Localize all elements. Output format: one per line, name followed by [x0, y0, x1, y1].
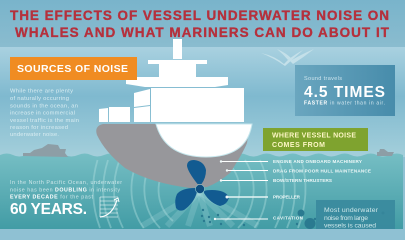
- callout lines and labels: DRAG FROM POOR HULL MAINTENANCE: [273, 169, 371, 174]
- text: doubling stat: [10, 180, 122, 218]
- title: THE EFFECTS OF VESSEL UNDERWATER NOISE ON: [10, 8, 389, 23]
- callout lines and labels: CAVITATION: [273, 216, 304, 221]
- text: sources paragraph: reason for increased: [10, 125, 68, 131]
- panel: where vessel noise comes from: [263, 128, 368, 151]
- bridge: [159, 64, 196, 78]
- text: doubling stat: noise has been DOUBLING in intensity: [10, 188, 120, 194]
- callout lines and labels: BOW/STERN THRUSTERS: [273, 178, 332, 183]
- bulb: [156, 124, 252, 157]
- panel: sound travels: 4.5 TIMES: [304, 84, 385, 101]
- text: sources paragraph: [10, 89, 79, 138]
- text: sources paragraph: underwater noise.: [10, 132, 59, 138]
- title band: [0, 0, 405, 47]
- distant ship left: [23, 144, 68, 157]
- text: doubling stat: In the North Pacific Ocean, underwater: [10, 180, 122, 186]
- propeller: [175, 160, 229, 211]
- panel: large vessels: noise from large: [324, 215, 368, 222]
- panel: sound travels: Sound travels: [304, 76, 342, 82]
- panel: where vessel noise comes from: COMES FROM: [272, 142, 325, 149]
- text: doubling stat: EVERY DECADE for the past: [10, 194, 94, 200]
- panel: where vessel noise comes from: WHERE VESSEL NOISE: [272, 132, 356, 140]
- panel: sound travels: FASTER in water than in air.: [304, 100, 385, 106]
- sea: [0, 154, 403, 229]
- icon: distant birds: [261, 49, 314, 66]
- panel: large vessels: [316, 200, 395, 230]
- text: sources paragraph: While there are plenty: [10, 89, 73, 95]
- panel: large vessels: Most underwater: [324, 207, 379, 214]
- title: WHALES AND WHAT MARINERS CAN DO ABOUT IT: [15, 25, 390, 40]
- mast: [173, 39, 182, 59]
- title: [10, 8, 390, 40]
- stat: 60 years: 60 YEARS.: [10, 201, 87, 218]
- distant ship right: [377, 149, 394, 156]
- heading: sources of noise: SOURCES OF NOISE: [17, 63, 128, 75]
- text: sources paragraph: of naturally occurring: [10, 96, 69, 102]
- ship: [96, 39, 252, 188]
- text: sources paragraph: increase in commercial: [10, 110, 75, 116]
- sound waves: [93, 160, 305, 228]
- containers: [99, 88, 244, 122]
- background sky: [0, 47, 405, 157]
- callout lines and labels: PROPELLER: [273, 195, 301, 200]
- text: sources paragraph: sounds in the ocean, an: [10, 103, 78, 109]
- light rays below propeller: [142, 192, 258, 226]
- deck: [126, 77, 228, 87]
- text: sources paragraph: vessel traffic is the main: [10, 118, 79, 124]
- icon: rising chart: [100, 197, 119, 217]
- bridge bar: [148, 60, 207, 64]
- callout lines and labels: ENGINE AND ONBOARD MACHINERY: [273, 159, 362, 164]
- callout lines and labels: [214, 159, 371, 221]
- hull: [96, 124, 250, 188]
- panel: sound travels: [295, 65, 395, 116]
- cavitation bubbles: [201, 209, 384, 229]
- heading: sources of noise: [10, 57, 137, 80]
